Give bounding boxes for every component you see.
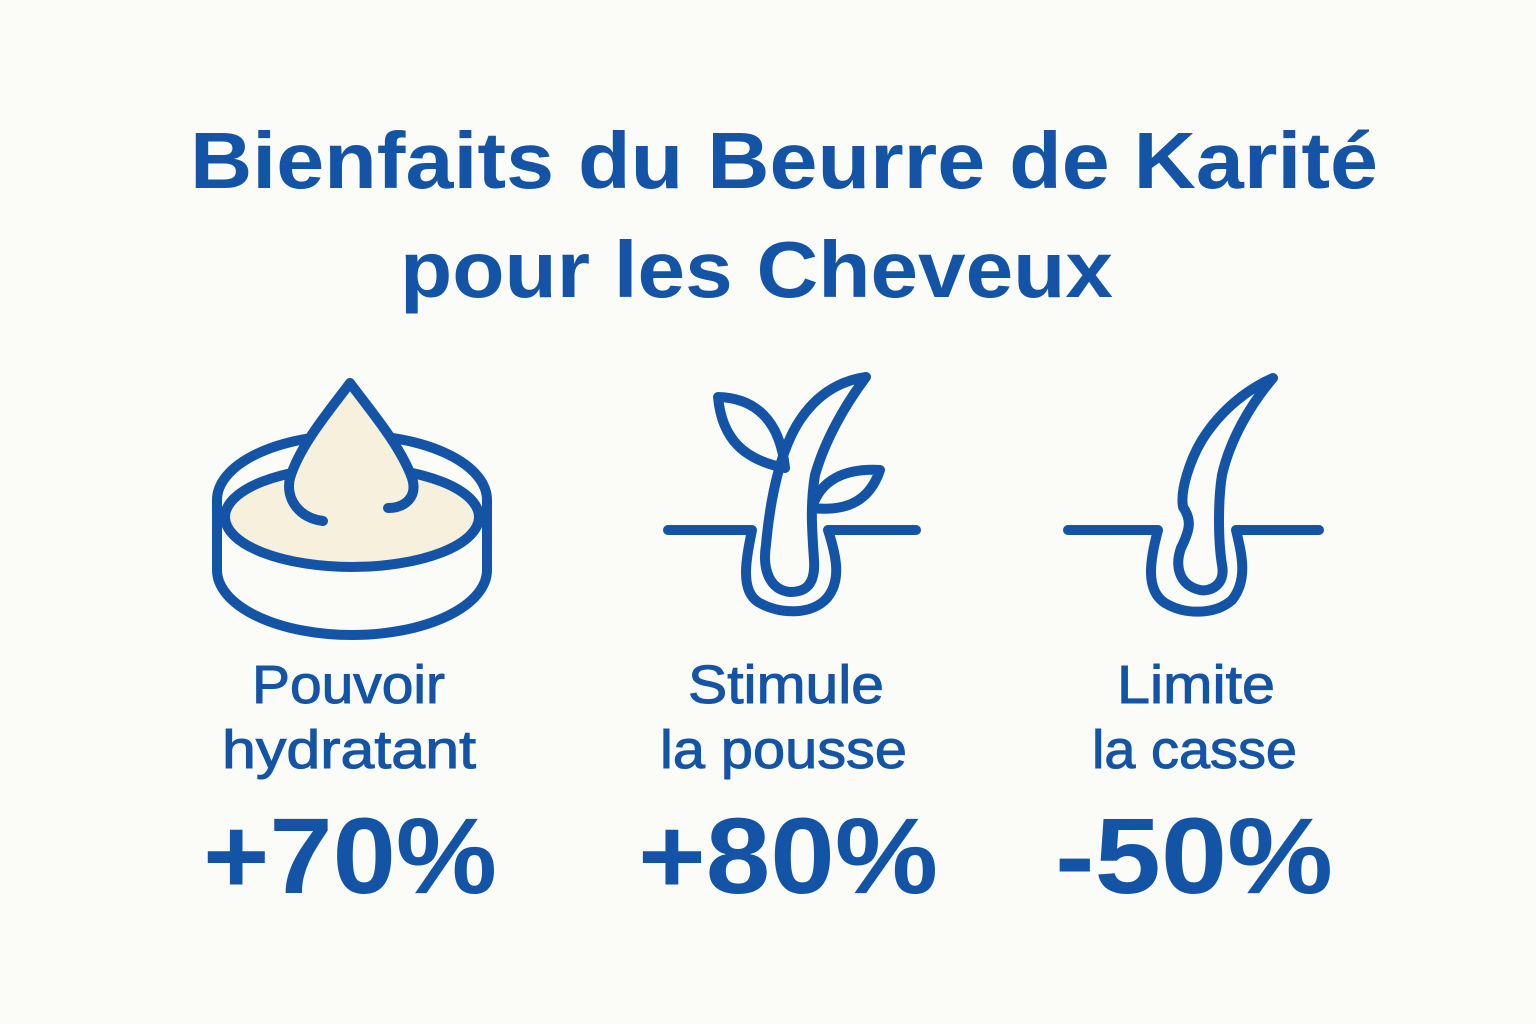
benefit 3 text: Limite	[1117, 655, 1275, 715]
icon: shea butter jar	[217, 383, 487, 635]
title	[190, 116, 1378, 314]
benefit 2 text	[638, 655, 938, 916]
benefit 1 text: hydratant	[222, 720, 476, 780]
benefit 2 text: la pousse	[660, 720, 907, 780]
benefit 2 text: +80%	[638, 795, 938, 916]
title: Bienfaits du Beurre de Karité	[190, 116, 1378, 205]
benefit 3 text: -50%	[1055, 795, 1333, 916]
benefit 2 text: Stimule	[688, 655, 884, 715]
icon: hair follicle	[1068, 378, 1319, 612]
benefit 3 text	[1055, 655, 1333, 916]
benefit 1 text	[203, 655, 497, 916]
benefit 1 text: +70%	[203, 795, 497, 916]
icon: sprouting hair	[668, 377, 916, 611]
title: pour les Cheveux	[400, 225, 1113, 314]
benefit 3 text: la casse	[1092, 720, 1297, 780]
benefit 1 text: Pouvoir	[252, 655, 445, 715]
